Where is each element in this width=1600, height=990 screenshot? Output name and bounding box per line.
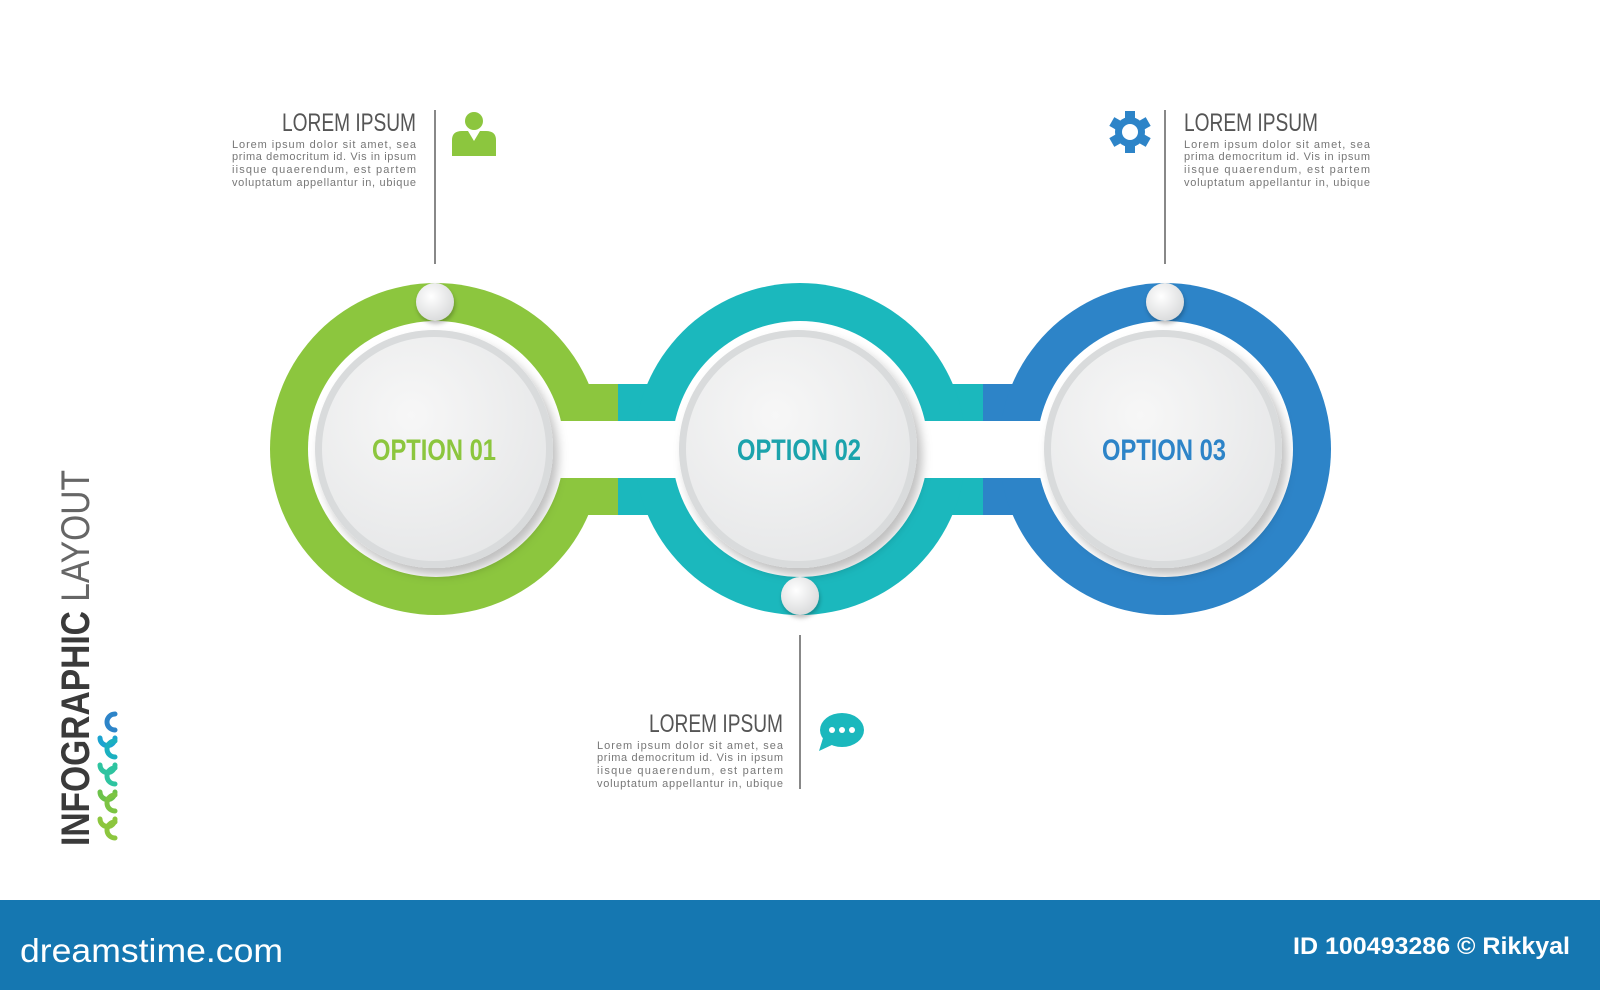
option 3 ring [999,283,1331,615]
footer bar [0,900,1600,990]
icon: wave marks [100,714,115,838]
text block 1: LOREM IPSUM [282,109,416,137]
text block 2: LOREM IPSUM [649,710,783,738]
pointer line 2 [799,635,801,789]
knob 3 [1146,283,1184,321]
text block 1: Lorem ipsum dolor sit amet, sea [232,139,417,151]
icon: person [452,112,496,156]
text block 2 [597,710,784,790]
pointer line 3 [1164,110,1166,264]
text block 3: prima democritum id. Vis in ipsum [1184,151,1370,163]
text block 3: LOREM IPSUM [1184,109,1318,137]
option 1 disk: OPTION 01 [372,434,496,467]
option 2 ring [634,283,966,615]
text block 2: iisque quaerendum, est partem [597,765,783,777]
text block 1: voluptatum appellantur in, ubique [232,177,416,189]
option 3 disk: OPTION 03 [1102,434,1226,467]
text block 3: voluptatum appellantur in, ubique [1184,177,1370,189]
text block 2: voluptatum appellantur in, ubique [597,778,783,790]
text block 1: iisque quaerendum, est partem [232,164,416,176]
option 2 disk [672,321,928,577]
option 1 ring [270,283,602,615]
text block 2: Lorem ipsum dolor sit amet, sea [597,740,784,752]
option 3 disk [1037,321,1293,577]
knob 2 [781,577,819,615]
footer bar: dreamstime.com [20,932,283,969]
option 1 disk [308,321,564,577]
pointer line 1 [434,110,436,264]
text block 3: Lorem ipsum dolor sit amet, sea [1184,139,1371,151]
vertical title: INFOGRAPHIC LAYOUT [54,470,98,846]
text block 1 [232,109,417,189]
knob 1 [416,283,454,321]
icon: gear [1109,111,1151,153]
text block 3 [1184,109,1371,189]
icon: chat bubble [819,713,864,751]
option 2 disk: OPTION 02 [737,434,861,467]
text block 3: iisque quaerendum, est partem [1184,164,1370,176]
text block 2: prima democritum id. Vis in ipsum [597,752,783,764]
footer bar: ID 100493286 © Rikkyal [1293,933,1570,960]
text block 1: prima democritum id. Vis in ipsum [232,151,416,163]
connector bands [436,384,1165,515]
